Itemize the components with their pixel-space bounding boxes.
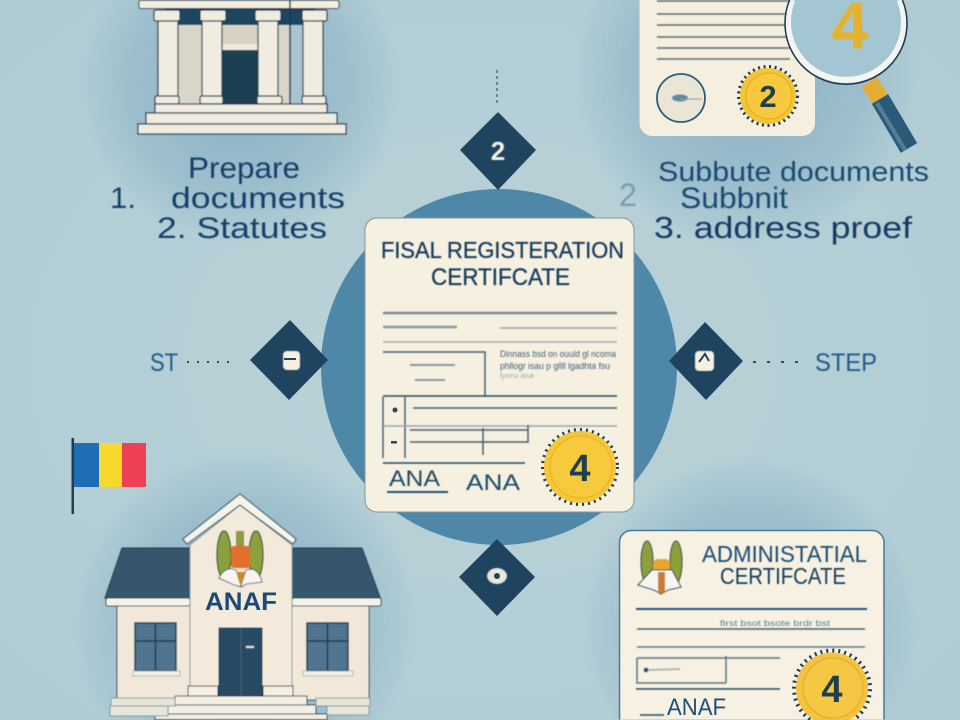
gold seal 2	[739, 67, 797, 125]
label: STEP right: STEP	[815, 349, 877, 377]
gold seal 4	[794, 651, 870, 720]
central circle	[321, 189, 677, 545]
step diamond: right	[669, 322, 743, 400]
certificate title: ADMINISTATIAL	[702, 541, 867, 567]
form lines	[636, 609, 867, 715]
text: submit documents list: 3. address proef	[654, 210, 912, 245]
emblem on certificate	[638, 541, 682, 594]
icon: bank building	[138, 0, 346, 134]
gold seal 4: 4	[821, 669, 843, 711]
signatures	[389, 466, 520, 495]
small print: lyoru asa	[500, 373, 534, 380]
small print: Dinnass bsd on ouuld gl ncoma	[500, 349, 617, 360]
text: prepare documents list	[110, 152, 345, 245]
text: ANAF on building: ANAF	[205, 588, 277, 616]
certificate title: FISAL REGISTERATION	[381, 237, 624, 263]
stamp circle	[657, 74, 705, 122]
text: submit documents list: Subbnit	[680, 182, 789, 215]
small print: first bsot bsote brdr bst	[720, 619, 831, 628]
central certificate	[365, 218, 634, 512]
small print: phllogr isau p gllll lgadhta fsu	[500, 361, 610, 372]
text: prepare documents list: documents	[171, 182, 345, 215]
signatures: ANA	[466, 470, 520, 495]
step diamond: bottom	[459, 539, 535, 616]
text: submit documents list: Subbute documents	[658, 156, 929, 187]
dotted connector: left	[187, 361, 234, 363]
text: submit documents list: 2	[619, 177, 637, 213]
step diamond: top: 2	[491, 136, 505, 166]
document with seal (top right)	[640, 0, 815, 136]
step diamond: left	[250, 320, 328, 400]
gold seal 4	[543, 430, 617, 504]
icon: Romanian flag	[72, 438, 146, 514]
text: submit documents list	[619, 156, 929, 245]
dotted connector: right	[753, 361, 800, 363]
table markers	[391, 408, 398, 444]
administrative certificate	[620, 530, 884, 720]
certificate title: CERTIFCATE	[431, 264, 570, 291]
icon: emblem on building	[217, 531, 263, 587]
label: ST left: ST	[150, 349, 178, 377]
gold seal 2: 2	[759, 79, 777, 114]
text: prepare documents list: Prepare	[188, 152, 300, 185]
signatures: ANA	[389, 466, 440, 491]
icon: ANAF building	[105, 494, 381, 720]
small print	[500, 349, 617, 380]
step diamond: top	[460, 112, 536, 190]
text: prepare documents list: 2. Statutes	[157, 212, 327, 245]
gold seal 4: 4	[569, 448, 591, 490]
form lines and table	[383, 313, 617, 492]
certificate title	[381, 237, 624, 291]
certificate title	[702, 541, 867, 589]
certificate title: CERTIFCATE	[720, 563, 846, 589]
dotted connector: top	[496, 70, 498, 103]
text: prepare documents list: 1.	[110, 182, 136, 215]
icon: magnifying glass	[785, 0, 909, 150]
